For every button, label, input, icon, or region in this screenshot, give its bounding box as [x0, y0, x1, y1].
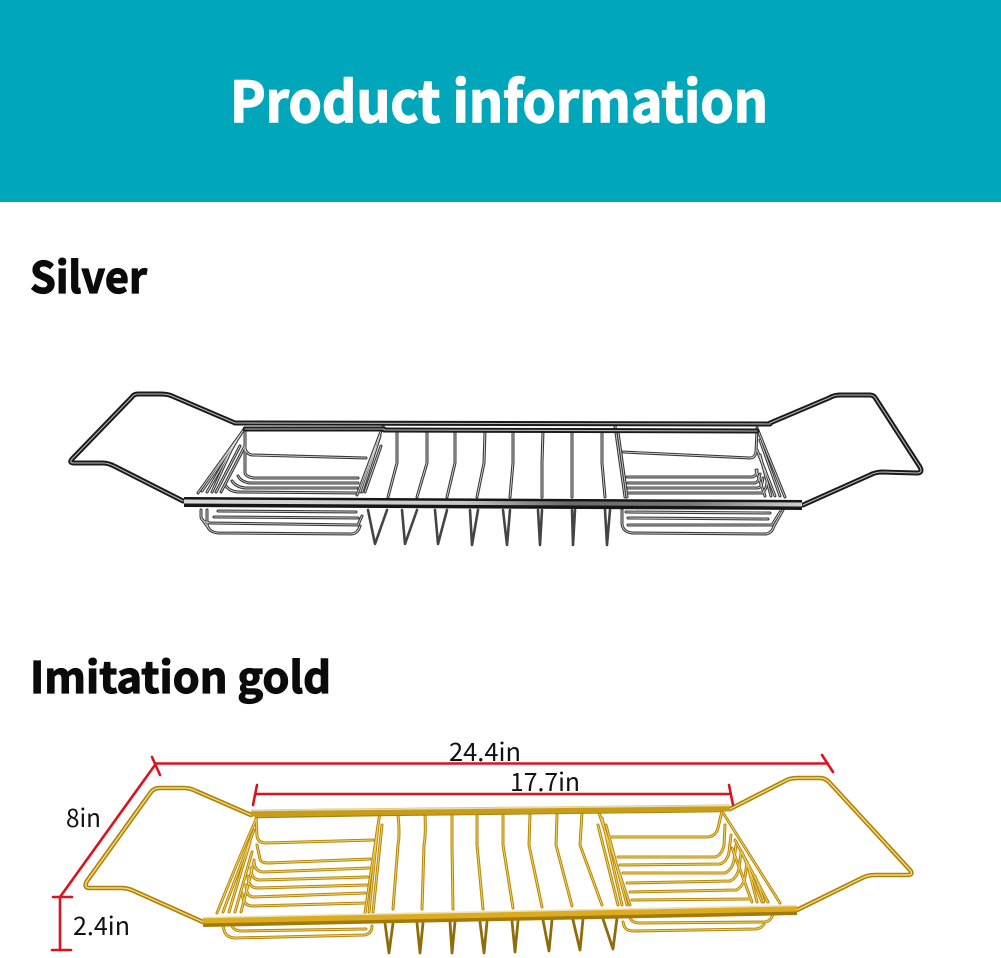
heading: Imitation gold: Imitation gold [30, 644, 331, 706]
dimension: height 2.4in [52, 897, 130, 950]
heading: Silver: Silver [30, 244, 147, 306]
dimension: width 8in: 8in [66, 799, 101, 835]
dimension: height 2.4in: 2.4in [73, 907, 130, 943]
title: Product information [230, 58, 768, 139]
product image: silver bath tray [71, 394, 921, 545]
front rail [184, 502, 802, 505]
front rail [203, 906, 797, 922]
back rail [251, 806, 730, 813]
dimension: inner length 17.7in [253, 763, 733, 805]
dimension: inner length 17.7in: 17.7in [510, 763, 580, 799]
dimension: overall length 24.4in: 24.4in [449, 733, 521, 769]
dimension: overall length 24.4in [152, 733, 833, 775]
product image: gold bath tray [86, 778, 911, 953]
banner: teal header [0, 0, 1001, 202]
dimension: width 8in [60, 765, 155, 897]
